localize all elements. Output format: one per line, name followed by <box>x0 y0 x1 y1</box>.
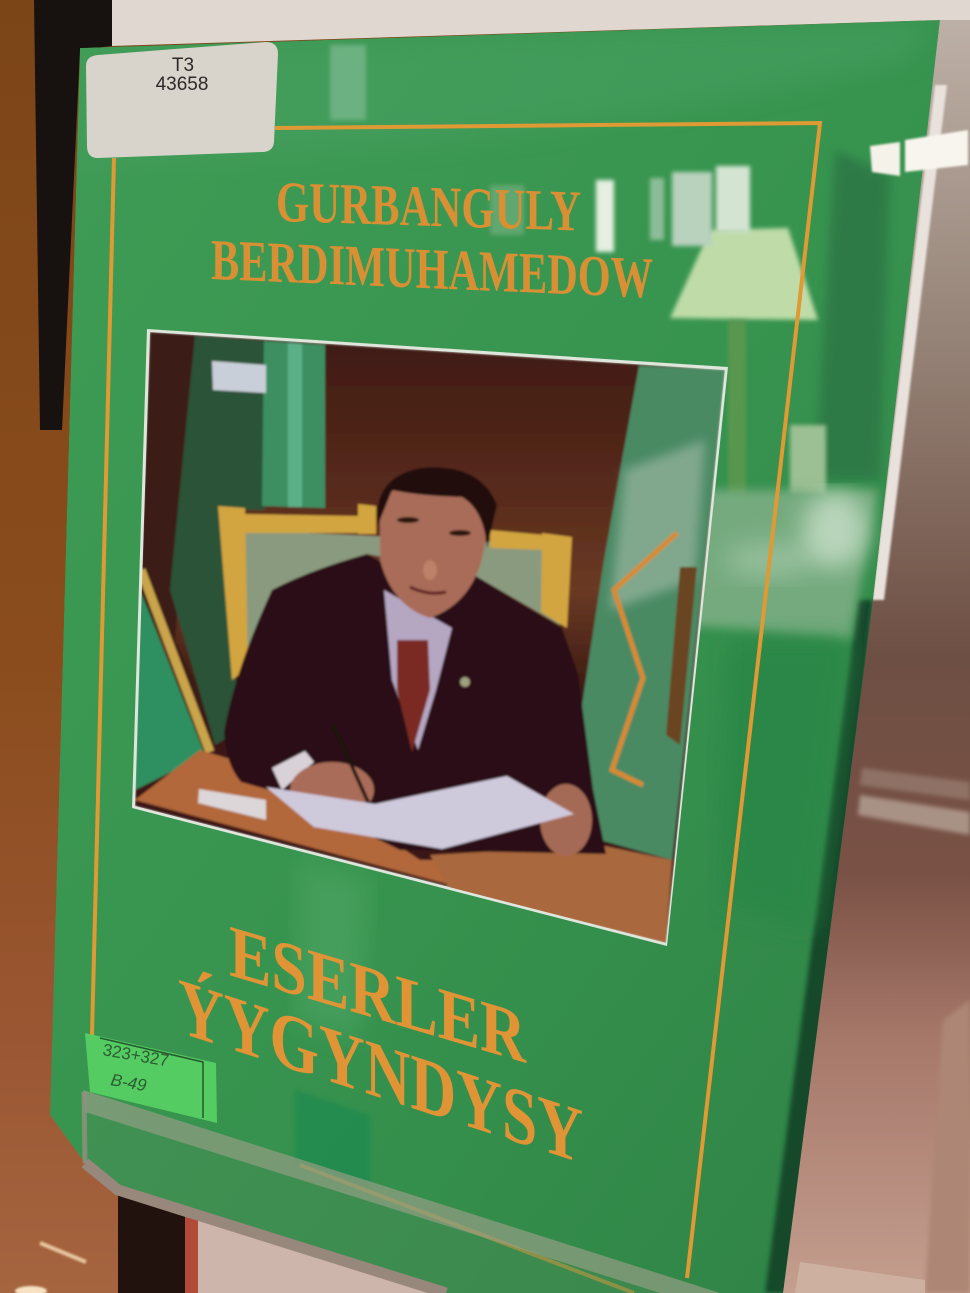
green shelf sticker: B-49 <box>109 1070 149 1095</box>
reflection: top arc <box>77 21 902 151</box>
green shelf sticker: 323+327 <box>101 1040 170 1071</box>
maroon curtain left <box>142 336 192 678</box>
right green drape <box>578 366 725 860</box>
reflection: vertical lighter streak <box>298 870 366 1031</box>
tie <box>397 640 430 752</box>
book title <box>179 926 582 1160</box>
reflection: teal darker patch <box>295 1090 370 1190</box>
author name: GURBANGULY <box>276 169 581 244</box>
reflection: sheen highlights <box>725 492 867 578</box>
desk lower right <box>430 845 672 943</box>
decorative orange border <box>92 123 820 1293</box>
shirt <box>384 590 452 750</box>
dark green flag <box>170 336 265 745</box>
reflection: top right window <box>870 130 968 176</box>
call number label: T3 43658: T3 <box>172 55 194 76</box>
desk <box>135 748 447 886</box>
book title: ESERLER <box>229 910 527 1080</box>
acrylic holder <box>83 1090 720 1293</box>
open document <box>266 776 574 849</box>
chair upholstery <box>244 532 562 650</box>
call number label: T3 43658 <box>86 42 278 158</box>
author name: BERDIMUHAMEDOW <box>211 227 653 311</box>
left hand <box>540 784 592 856</box>
gold diagonal trim <box>141 570 210 752</box>
flag highlight <box>288 343 302 507</box>
white book pages edge <box>872 85 947 600</box>
facial features <box>397 517 471 593</box>
reflection: bright lower right sheen <box>690 490 878 640</box>
reflection: dark green right column <box>815 150 890 480</box>
lower display floor <box>118 1000 970 1293</box>
photo background <box>135 332 725 943</box>
reflection: lamp shade <box>670 228 818 320</box>
reflection: lamp base <box>728 320 746 500</box>
portrait photograph <box>132 329 728 946</box>
reflection: windows <box>330 45 826 495</box>
chair gilt frame <box>218 504 572 680</box>
suit <box>224 554 606 854</box>
green flag folds <box>262 341 325 508</box>
hair <box>377 467 497 548</box>
dark case edge <box>34 0 112 430</box>
reflection: bottom left glints <box>15 1243 86 1293</box>
green shelf sticker <box>85 1033 217 1123</box>
right wall <box>780 20 970 1293</box>
call number label: T3 43658: 43658 <box>156 74 208 95</box>
lapel pin <box>460 677 470 687</box>
calligraphy strip <box>666 567 697 745</box>
hand and pen <box>290 762 374 818</box>
shelf ledge <box>858 768 970 835</box>
green panel lower left <box>135 590 205 790</box>
drape sheen <box>610 440 705 610</box>
head <box>380 478 486 618</box>
drape zigzag <box>612 533 677 785</box>
book title: ÝYGYNDYSY <box>178 961 583 1181</box>
white flag band <box>212 361 266 393</box>
white cuff <box>272 751 314 790</box>
author name <box>212 183 652 298</box>
dark book edge <box>765 600 873 1293</box>
pale top wall <box>112 0 970 100</box>
reflection: lower shadow <box>720 640 850 930</box>
small note <box>198 789 266 820</box>
